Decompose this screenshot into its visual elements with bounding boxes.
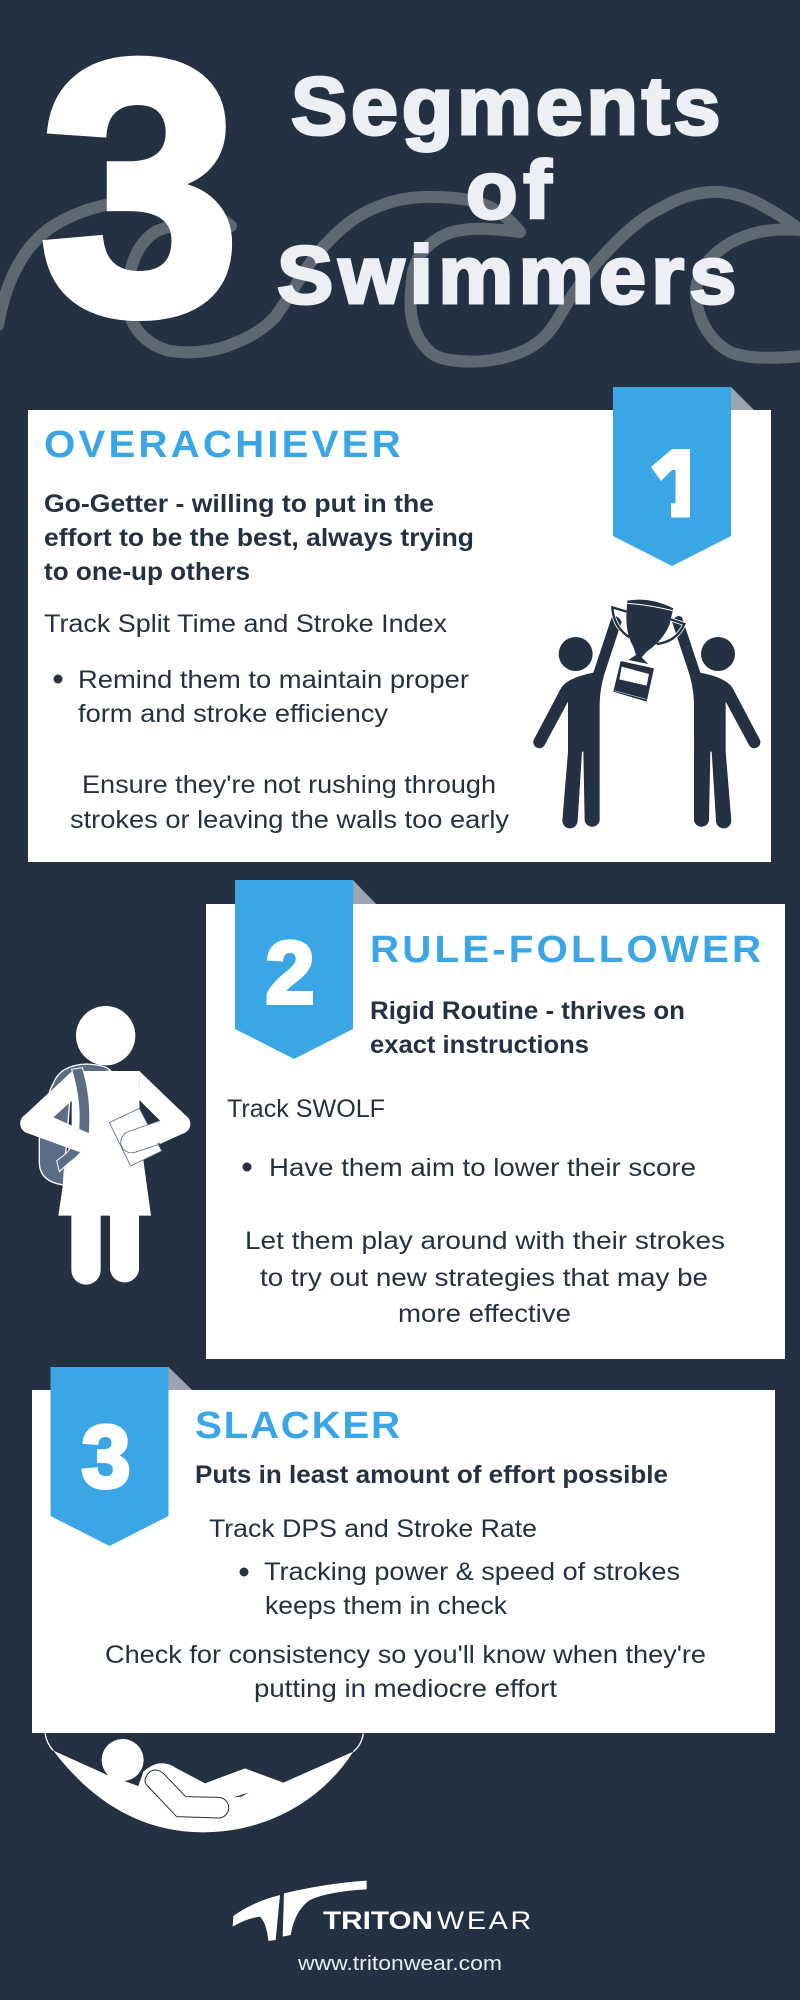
advice text: Check for consistency so you'll know when they're [105, 1641, 706, 1669]
decorative waves [0, 192, 800, 362]
metric line: Track DPS and Stroke Rate [209, 1515, 537, 1543]
heading: rule-follower: RULE-FOLLOWER [370, 929, 761, 971]
icon: two people lifting trophy [533, 600, 760, 828]
bullet tip: Have them aim to lower their score [269, 1154, 696, 1182]
description: go-getter: to one-up others [44, 558, 250, 586]
advice text [245, 1227, 725, 1328]
description: go-getter [44, 490, 474, 586]
advice text: Let them play around with their strokes [245, 1227, 725, 1255]
advice text: to try out new strategies that may be [260, 1264, 708, 1292]
bullet tip [240, 1558, 680, 1620]
metric line: Track Split Time and Stroke Index [44, 610, 448, 638]
advice text [105, 1641, 706, 1703]
icon: trident mark [233, 1881, 367, 1941]
wordmark: WEAR [437, 1907, 531, 1935]
ribbon 3 [50, 1367, 192, 1546]
description: rigid routine [370, 997, 685, 1059]
bullet tip: Tracking power & speed of strokes [264, 1558, 680, 1586]
advice text [70, 771, 510, 834]
bullet tip: form and stroke efficiency [78, 700, 389, 728]
bullet tip [54, 666, 469, 728]
advice text: Ensure they're not rushing through [82, 771, 496, 799]
title: Segments of Swimmers: of [466, 144, 552, 236]
bullet tip: Remind them to maintain proper [78, 666, 469, 694]
website: www.tritonwear.com [297, 1953, 502, 1975]
advice text: strokes or leaving the walls too early [70, 806, 510, 834]
wordmark: TRITON [323, 1907, 433, 1935]
bullet tip: keeps them in check [265, 1592, 508, 1620]
ribbon 2: 2 [266, 923, 314, 1022]
icon: person relaxing in hammock [45, 1733, 363, 1832]
panel: slacker [32, 1367, 775, 1733]
metric line: Track SWOLF [227, 1095, 385, 1123]
icon: student with backpack and book [20, 1006, 190, 1285]
heading: slacker: SLACKER [195, 1405, 400, 1447]
wordmark [323, 1907, 531, 1935]
panel: rule-follower [206, 880, 785, 1359]
advice text: putting in mediocre effort [254, 1675, 557, 1703]
heading: overachiever: OVERACHIEVER [44, 424, 401, 466]
ribbon 1: 1 [657, 435, 707, 535]
description: rigid routine: Rigid Routine - thrives on [370, 997, 685, 1025]
title: Segments of Swimmers: Segments [291, 60, 721, 152]
panel: overachiever [28, 387, 771, 862]
description: go-getter: effort to be the best, always trying [44, 524, 474, 552]
description: rigid routine: exact instructions [370, 1031, 589, 1059]
ribbon 1 [613, 387, 754, 566]
ribbon 3: 3 [82, 1407, 130, 1506]
description: go-getter: Go-Getter - willing to put in the [44, 490, 434, 518]
logo: tritonwear [233, 1881, 531, 1975]
title: Segments of Swimmers [277, 60, 736, 321]
advice text: more effective [398, 1300, 571, 1328]
ribbon 2 [235, 880, 376, 1059]
description: least effort: Puts in least amount of effort possible [195, 1461, 668, 1489]
title: Segments of Swimmers: Swimmers [277, 229, 736, 321]
